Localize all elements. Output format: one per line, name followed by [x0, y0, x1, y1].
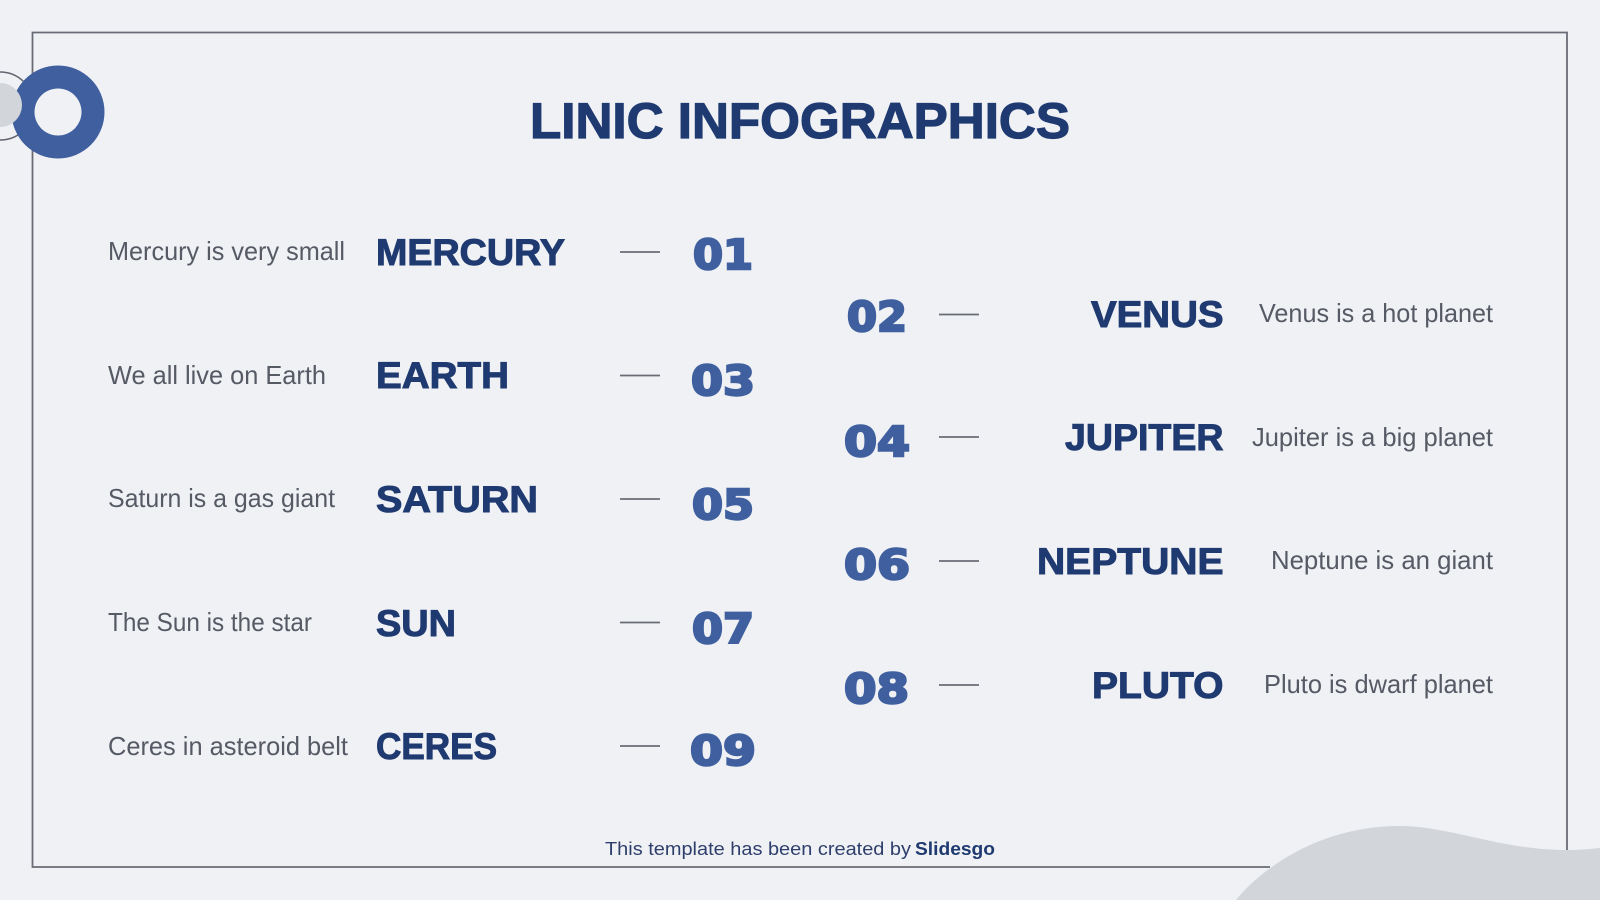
item: Mercury [108, 231, 753, 279]
item: Neptune: NEPTUNE [1037, 541, 1224, 582]
item: Mercury: Mercury is very small [108, 236, 345, 266]
item: Venus [847, 293, 1494, 341]
icon: planet rings top left [0, 66, 104, 158]
item: Sun: 07 [692, 605, 754, 653]
item: Sun: The Sun is the star [108, 607, 312, 637]
item: Jupiter [844, 417, 1494, 466]
item: Venus: 02 [847, 293, 907, 341]
item: Saturn: 05 [692, 481, 754, 529]
item: Saturn: Saturn is a gas giant [108, 483, 336, 513]
item: Venus: VENUS [1091, 294, 1224, 335]
footer credit: This template has been created by [605, 839, 911, 859]
item: Saturn [108, 479, 754, 529]
item: Venus: Venus is a hot planet [1259, 298, 1494, 328]
item: Ceres: 09 [690, 727, 756, 775]
item: Ceres: Ceres in asteroid belt [108, 731, 349, 761]
item: Earth [108, 355, 755, 405]
item: Neptune [844, 541, 1494, 589]
item: Ceres [108, 726, 756, 775]
item: Pluto: 08 [844, 665, 909, 713]
item: Sun [108, 603, 754, 653]
item: Neptune: Neptune is an giant [1271, 545, 1494, 575]
item: Earth: EARTH [376, 355, 509, 396]
item: Earth: 03 [691, 357, 755, 405]
footer credit: Slidesgo [915, 839, 995, 859]
item: Neptune: 06 [844, 541, 910, 589]
item: Pluto: Pluto is dwarf planet [1264, 669, 1494, 699]
item: Jupiter: 04 [844, 418, 910, 466]
title: LINIC INFOGRAPHICS [530, 93, 1070, 149]
item: Pluto [844, 665, 1494, 713]
item: Mercury: MERCURY [376, 232, 565, 273]
item: Ceres: CERES [376, 726, 497, 767]
item: Earth: We all live on Earth [108, 360, 326, 390]
item: Pluto: PLUTO [1092, 665, 1224, 706]
item: Jupiter: JUPITER [1065, 417, 1224, 458]
item: Saturn: SATURN [376, 479, 538, 520]
item: Jupiter: Jupiter is a big planet [1252, 422, 1494, 452]
item: Mercury: 01 [693, 231, 753, 279]
decorative wave bottom right [1236, 826, 1600, 900]
item: Sun: SUN [376, 603, 456, 644]
